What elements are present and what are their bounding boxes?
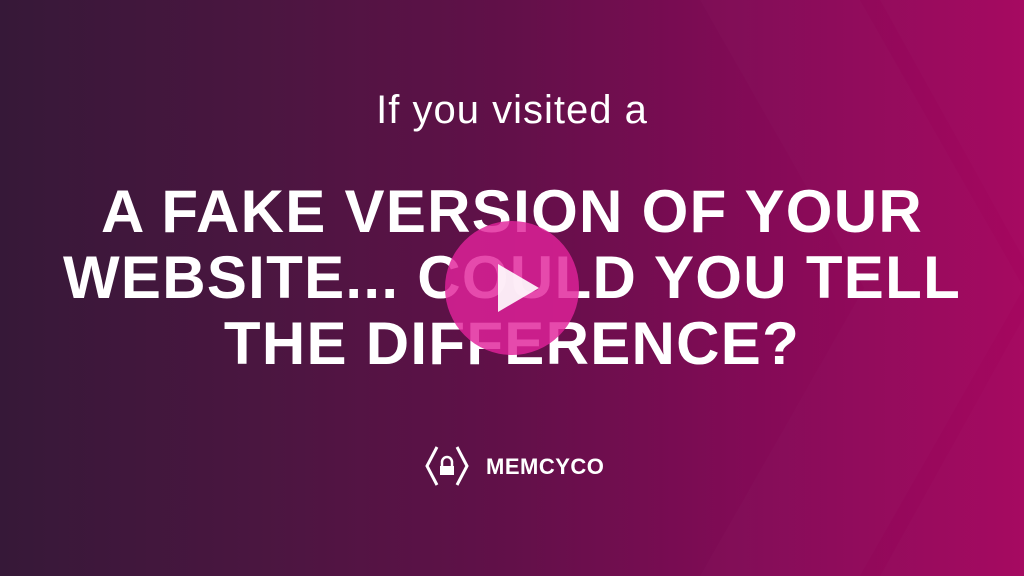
icon: play button <box>445 221 579 355</box>
title: WEBSITE... COULD YOU TELL <box>63 244 961 311</box>
subtitle: If you visited a <box>376 88 648 132</box>
logo <box>425 446 604 486</box>
title: THE DIFFERENCE? <box>224 310 800 377</box>
logo text: MEMCYCO <box>486 454 604 479</box>
icon: lock brackets <box>425 446 469 486</box>
title <box>63 178 961 377</box>
title: A FAKE VERSION OF YOUR <box>101 178 923 245</box>
